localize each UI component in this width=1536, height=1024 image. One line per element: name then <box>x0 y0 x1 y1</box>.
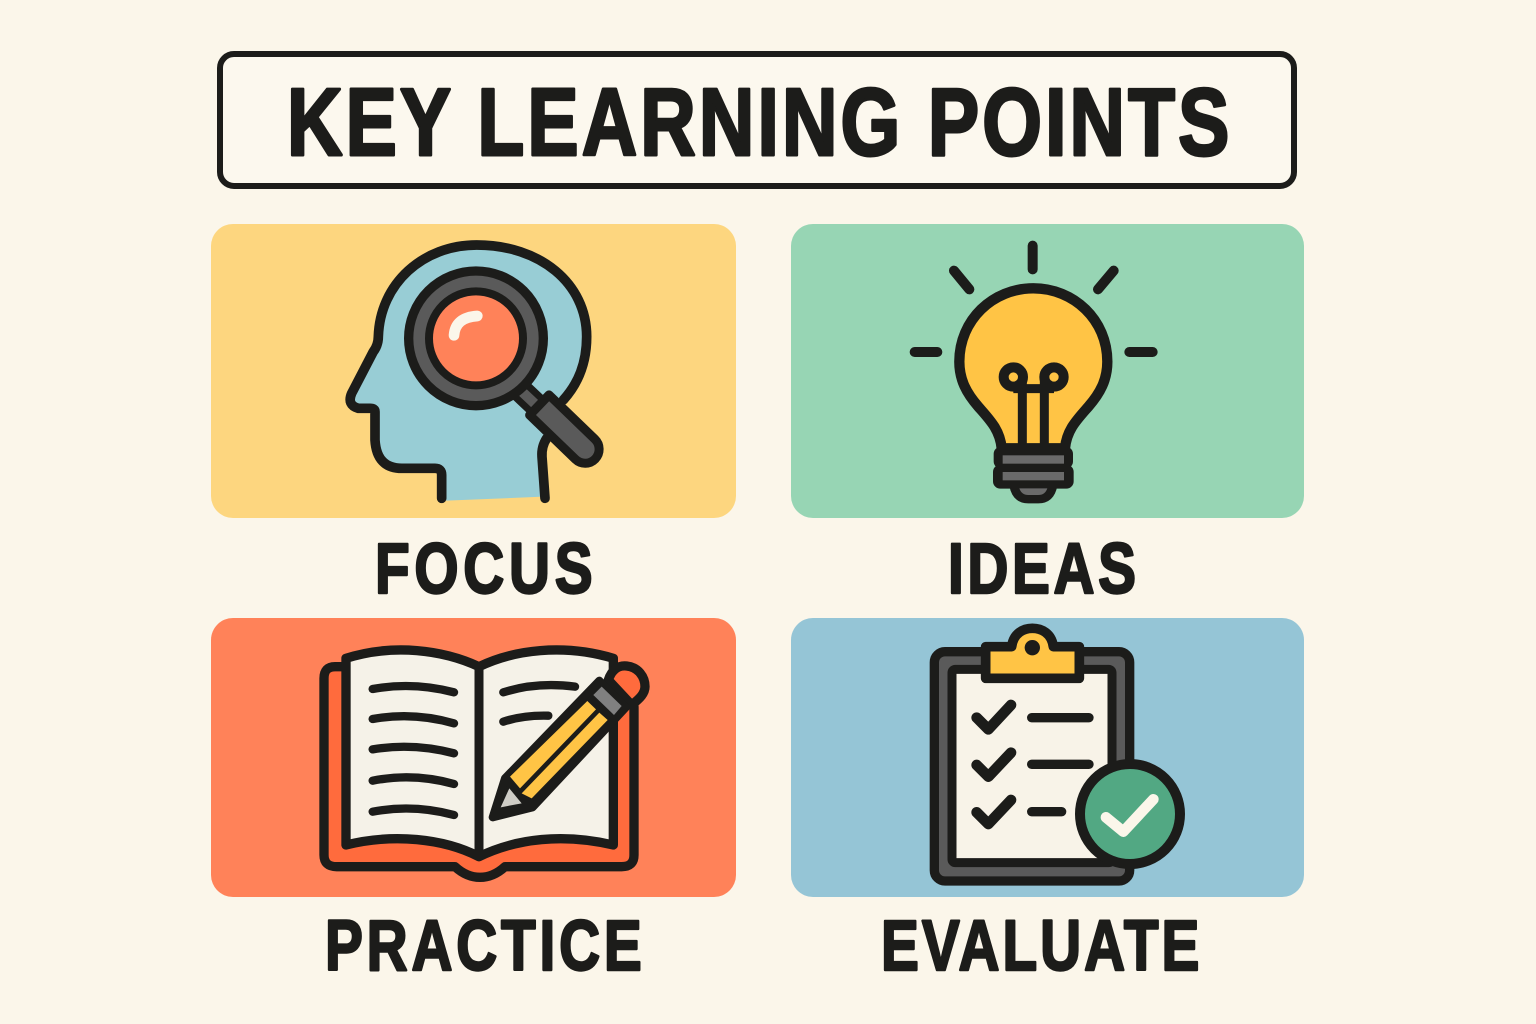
label: practice: PRACTICE <box>325 906 642 985</box>
icon: open book with pencil <box>324 650 645 877</box>
label: focus: FOCUS <box>375 529 593 608</box>
label: evaluate: EVALUATE <box>881 906 1199 985</box>
icon: clipboard with check badge <box>934 628 1180 881</box>
label: ideas: IDEAS <box>948 529 1136 608</box>
panel: focus <box>211 224 736 518</box>
title: KEY LEARNING POINTS <box>287 69 1229 176</box>
panel: ideas <box>791 224 1304 518</box>
icon: head with magnifying glass <box>350 245 605 501</box>
icon: light bulb <box>915 246 1153 503</box>
panel: evaluate <box>791 618 1304 897</box>
panel: practice <box>211 618 736 897</box>
